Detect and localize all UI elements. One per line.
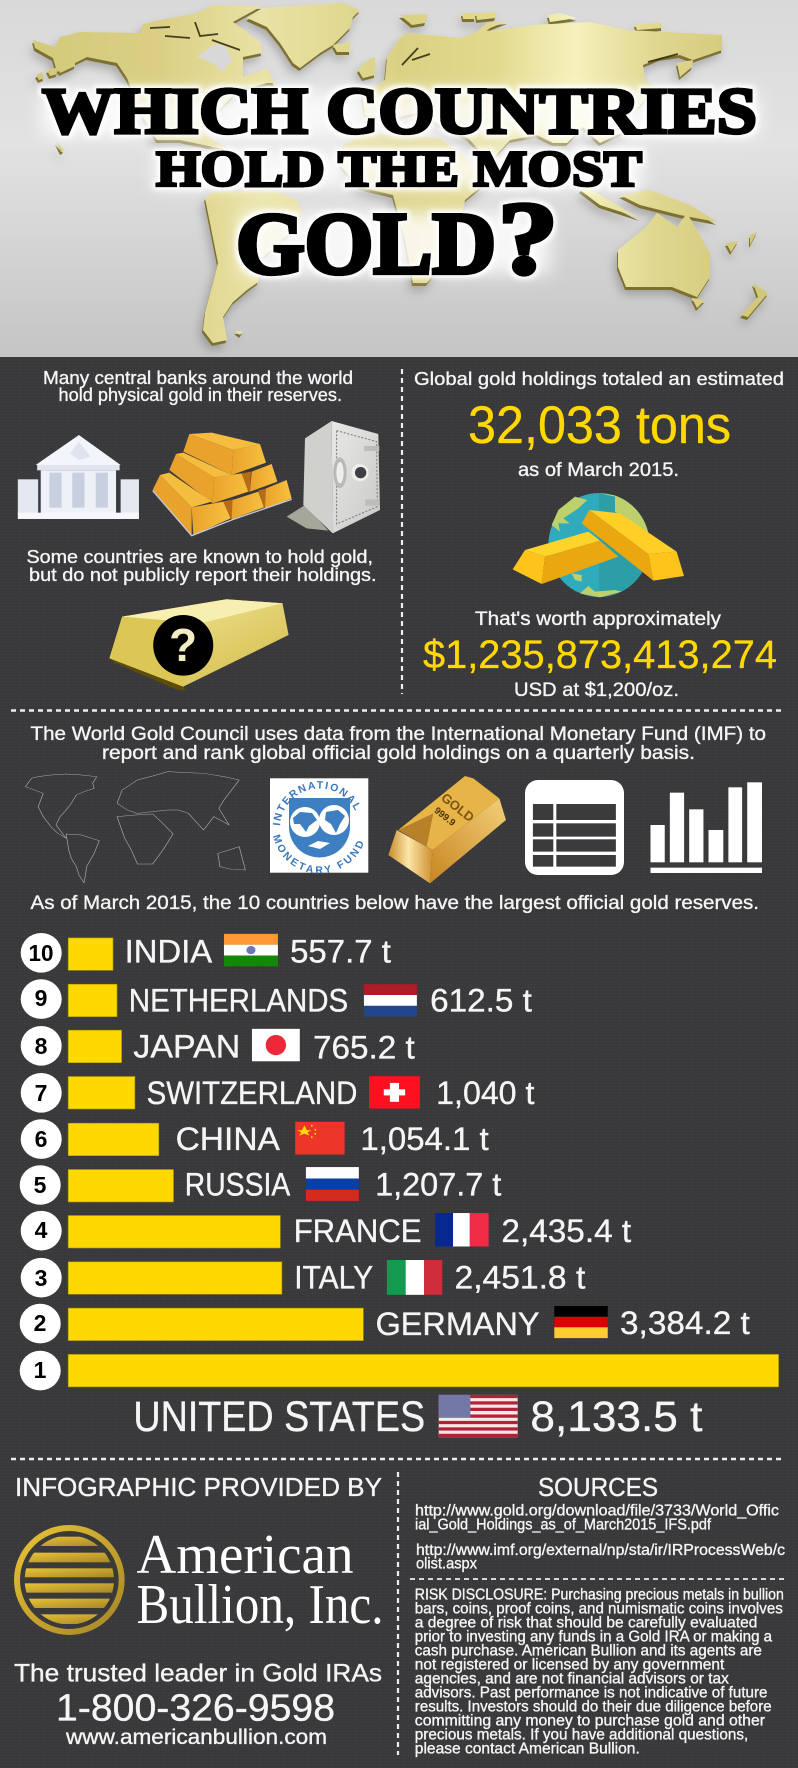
- risk disclosure: cash purchase. American Bullion and its agents are: [415, 1643, 762, 1660]
- risk disclosure: not registered or licensed by any government: [415, 1657, 725, 1674]
- chart: country names: SWITZERLAND: [147, 1075, 357, 1111]
- risk disclosure: a degree of risk that should be carefully evaluated: [415, 1615, 757, 1632]
- chart: country names: RUSSIA: [185, 1166, 291, 1202]
- text: unreported holdings: but do not publicly report their holdings.: [29, 564, 376, 585]
- stat: 32,033 tons: 32,033 tons: [468, 396, 731, 455]
- icon: data table: [525, 780, 624, 875]
- chart: country names: UNITED STATES: [133, 1393, 425, 1441]
- title: ?: [498, 181, 558, 296]
- chart: rank numbers: [28, 940, 54, 1383]
- chart: rank numbers: 6: [35, 1126, 47, 1152]
- chart: country names: NETHERLANDS: [129, 982, 348, 1018]
- chart: country names: FRANCE: [294, 1213, 422, 1249]
- chart: tonnage values: [290, 933, 750, 1441]
- chart: country names: INDIA: [125, 933, 213, 969]
- title: HOLD THE MOST: [156, 142, 642, 198]
- chart: tonnage values: 3,384.2 t: [620, 1305, 750, 1341]
- chart: tonnage values: 1,054.1 t: [360, 1121, 489, 1157]
- text: worth approximately: That's worth approximately: [475, 609, 722, 630]
- hudson bay: [197, 45, 232, 72]
- chart: tonnage values: 1,207.7 t: [375, 1166, 501, 1202]
- icon: vault safe: [287, 421, 380, 533]
- icon: IMF logo: MONETARY FUND: [273, 834, 363, 874]
- text: global holdings: Global gold holdings totaled an estimated: [414, 368, 784, 389]
- chart: country names: GERMANY: [376, 1306, 540, 1342]
- chart: rank numbers: 4: [35, 1217, 48, 1243]
- risk disclosure: bars, coins, proof coins, and numismatic coins involves: [415, 1601, 783, 1618]
- tagline: The trusted leader in Gold IRAs: [14, 1660, 382, 1688]
- text: as of March 2015 intro: As of March 2015, the 10 countries below have the largest official gold reserves.: [30, 892, 759, 914]
- chart: rank circles: [20, 933, 62, 1390]
- source links: http://www.imf.org/external/np/sta/ir/IRProcessWeb/c: [416, 1542, 785, 1559]
- text: unreported holdings: [26, 546, 376, 585]
- text: unreported holdings: Some countries are known to hold gold,: [26, 546, 373, 567]
- dark textured background: [0, 357, 798, 1768]
- chart: rank numbers: 3: [35, 1265, 47, 1291]
- text: World Gold Council: [30, 723, 766, 764]
- source links: [415, 1503, 785, 1573]
- icons: country flags: [224, 934, 608, 1338]
- chart: country names: JAPAN: [133, 1029, 240, 1065]
- stat: dollar value: $1,235,873,413,274: [423, 633, 777, 677]
- heading: provided by: INFOGRAPHIC PROVIDED BY: [15, 1472, 382, 1502]
- icon: gold bar with question mark: ?: [169, 619, 197, 671]
- chart: tonnage values: 557.7 t: [290, 933, 391, 969]
- icon: American Bullion logo: [14, 1525, 125, 1635]
- chart: rank numbers: 10: [28, 940, 54, 966]
- risk disclosure: [415, 1587, 784, 1758]
- logo wordmark: American: [136, 1524, 354, 1586]
- text: World Gold Council: report and rank global official gold holdings on a quarterly basis.: [102, 742, 695, 764]
- chart: rank numbers: 1: [34, 1357, 47, 1383]
- text: World Gold Council: The World Gold Council uses data from the International Monetary Fund (IMF) to: [30, 723, 766, 745]
- logo wordmark: [136, 1524, 384, 1636]
- title glow wash: [42, 92, 758, 274]
- intro text: central banks: Many central banks around the world: [43, 368, 353, 388]
- chart: gold reserve bars: [68, 938, 779, 1387]
- icon: bar chart: [651, 782, 762, 873]
- chart: country names: [125, 933, 539, 1441]
- chart: tonnage values: 765.2 t: [313, 1030, 415, 1066]
- chart: rank numbers: 8: [35, 1033, 48, 1059]
- risk disclosure: precious metals. If you have additional questions,: [415, 1727, 748, 1744]
- risk disclosure: agencies, and are not financial advisors or tax: [415, 1671, 729, 1688]
- text: USD at price: USD at $1,200/oz.: [514, 679, 679, 701]
- chart: tonnage values: 1,040 t: [436, 1075, 535, 1111]
- icon: gold ingot: GOLD: [438, 790, 477, 825]
- panel dividers: [11, 369, 788, 1755]
- gold world map: [33, 3, 768, 343]
- chart: tonnage values: 2,451.8 t: [454, 1260, 585, 1296]
- chart: tonnage values: 8,133.5 t: [530, 1393, 702, 1441]
- risk disclosure: advisors. Past performance is not indicative of future: [415, 1685, 768, 1702]
- chart: country names: ITALY: [294, 1260, 373, 1296]
- icon: gold bar with question mark: [109, 599, 289, 691]
- risk disclosure: results. Investors should do their due diligence before: [415, 1699, 772, 1716]
- icon: gold bar stack: [153, 433, 292, 536]
- header background: [0, 0, 798, 357]
- icon: gold ingot: 999.9: [432, 805, 457, 829]
- text: as of March 2015: as of March 2015.: [518, 460, 679, 481]
- icon: bank building: [18, 435, 139, 519]
- title: GOLD: [236, 196, 496, 293]
- heading: sources: SOURCES: [538, 1472, 658, 1502]
- title: WHICH COUNTRIES: [42, 75, 757, 148]
- risk disclosure: please contact American Bullion.: [415, 1741, 640, 1758]
- chart: rank numbers: 2: [34, 1310, 46, 1336]
- map coastline details: [150, 22, 678, 65]
- source links: http://www.gold.org/download/file/3733/World_Offic: [415, 1503, 779, 1520]
- chart: tonnage values: 2,435.4 t: [501, 1213, 631, 1249]
- logo wordmark: Bullion, Inc.: [136, 1574, 384, 1636]
- source links: ial_Gold_Holdings_as_of_March2015_IFS.pdf: [415, 1516, 712, 1533]
- icon: US flag: [439, 1395, 518, 1437]
- risk disclosure: committing any money to purchase gold and other: [415, 1713, 765, 1730]
- title: [42, 75, 757, 296]
- phone number: 1-800-326-9598: [56, 1688, 335, 1730]
- icon: IMF logo: [270, 778, 368, 874]
- chart: rank numbers: 9: [35, 985, 47, 1011]
- icon: globe with gold bars: [513, 493, 684, 597]
- chart: rank numbers: 5: [34, 1172, 47, 1198]
- chart: tonnage values: 612.5 t: [430, 982, 532, 1018]
- intro text: central banks: [43, 368, 353, 405]
- chart: rank numbers: 7: [35, 1080, 47, 1106]
- chart: country names: CHINA: [176, 1121, 281, 1157]
- intro text: central banks: hold physical gold in their reserves.: [58, 385, 342, 405]
- icon: world outline map: [25, 772, 245, 883]
- risk disclosure: prior to investing any funds in a Gold IRA or making a: [415, 1629, 772, 1646]
- icon: IMF logo: INTERNATIONAL: [272, 781, 360, 826]
- website: www.americanbullion.com: [65, 1726, 327, 1749]
- source links: olist.aspx: [416, 1556, 477, 1573]
- icon: gold ingot: [388, 776, 506, 883]
